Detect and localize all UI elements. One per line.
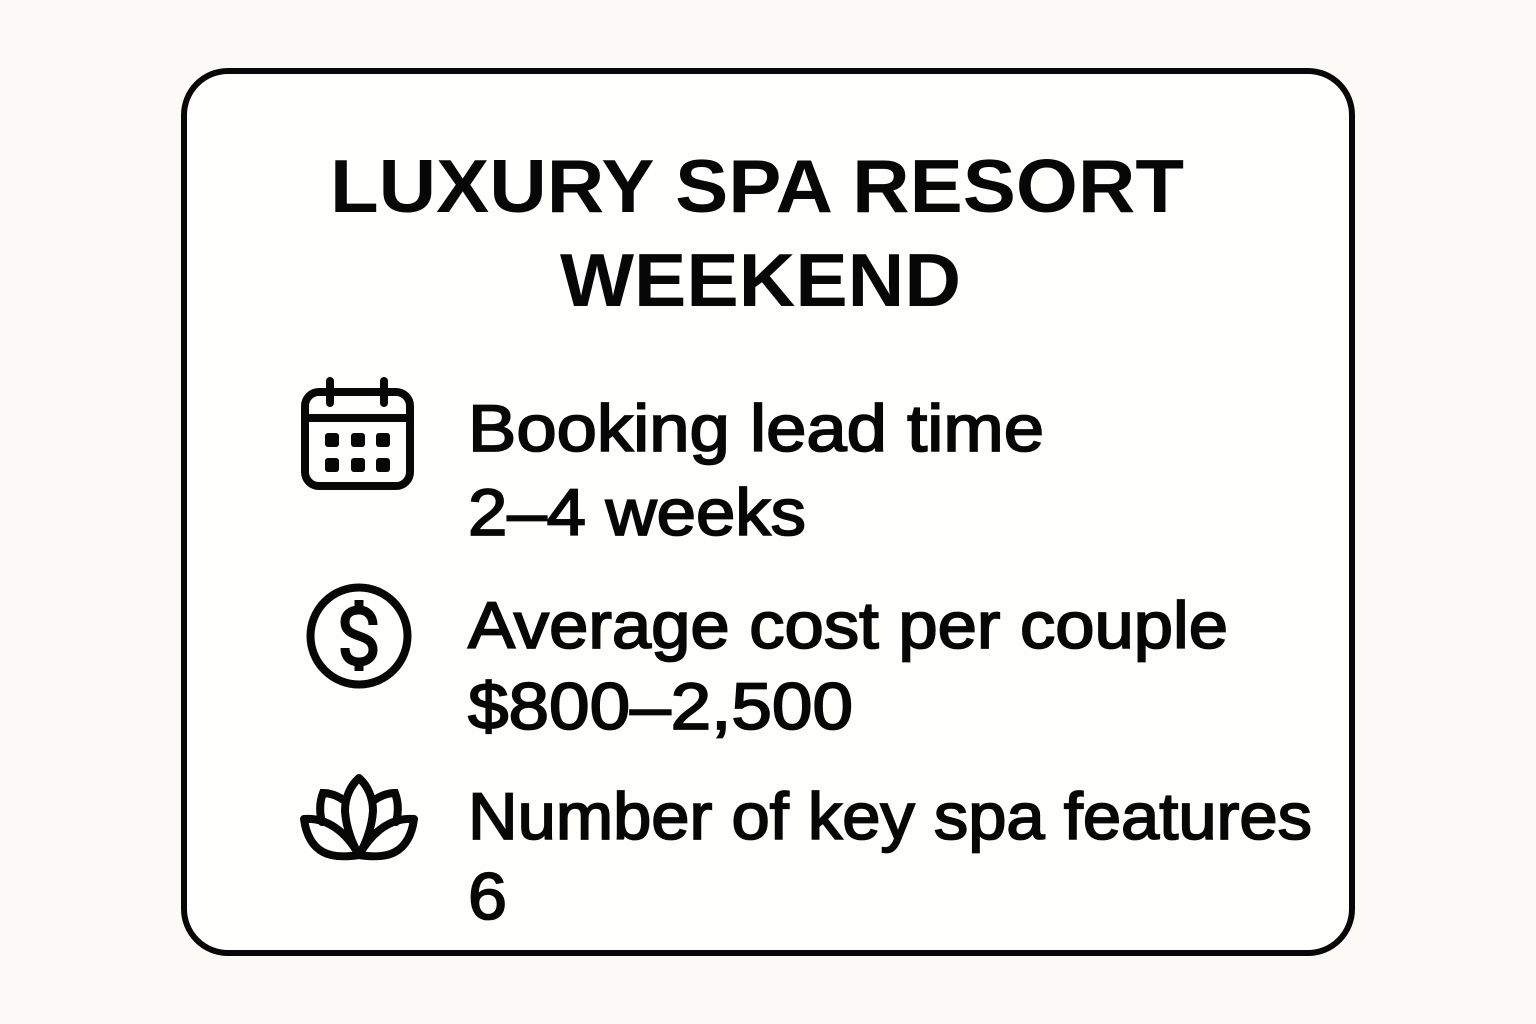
icon: lotus [304,778,414,856]
text block: booking lead time [468,391,1044,549]
text block: booking lead time: 2–4 weeks [468,475,806,549]
icon: calendar [305,381,410,486]
icon: dollar coin [310,588,408,684]
title: LUXURY SPA RESORT [330,144,1184,228]
title: WEEKEND [560,238,961,322]
title [330,144,1184,322]
text block: average cost per couple: $800–2,500 [468,669,853,743]
text block: average cost per couple [468,588,1228,743]
text block: number of key spa features [468,779,1312,933]
text block: number of key spa features: Number of key spa features [468,779,1312,853]
text block: number of key spa features: 6 [468,859,507,933]
text block: booking lead time: Booking lead time [468,391,1044,465]
text block: average cost per couple: Average cost per couple [468,588,1228,662]
panel: main card [184,71,1352,953]
